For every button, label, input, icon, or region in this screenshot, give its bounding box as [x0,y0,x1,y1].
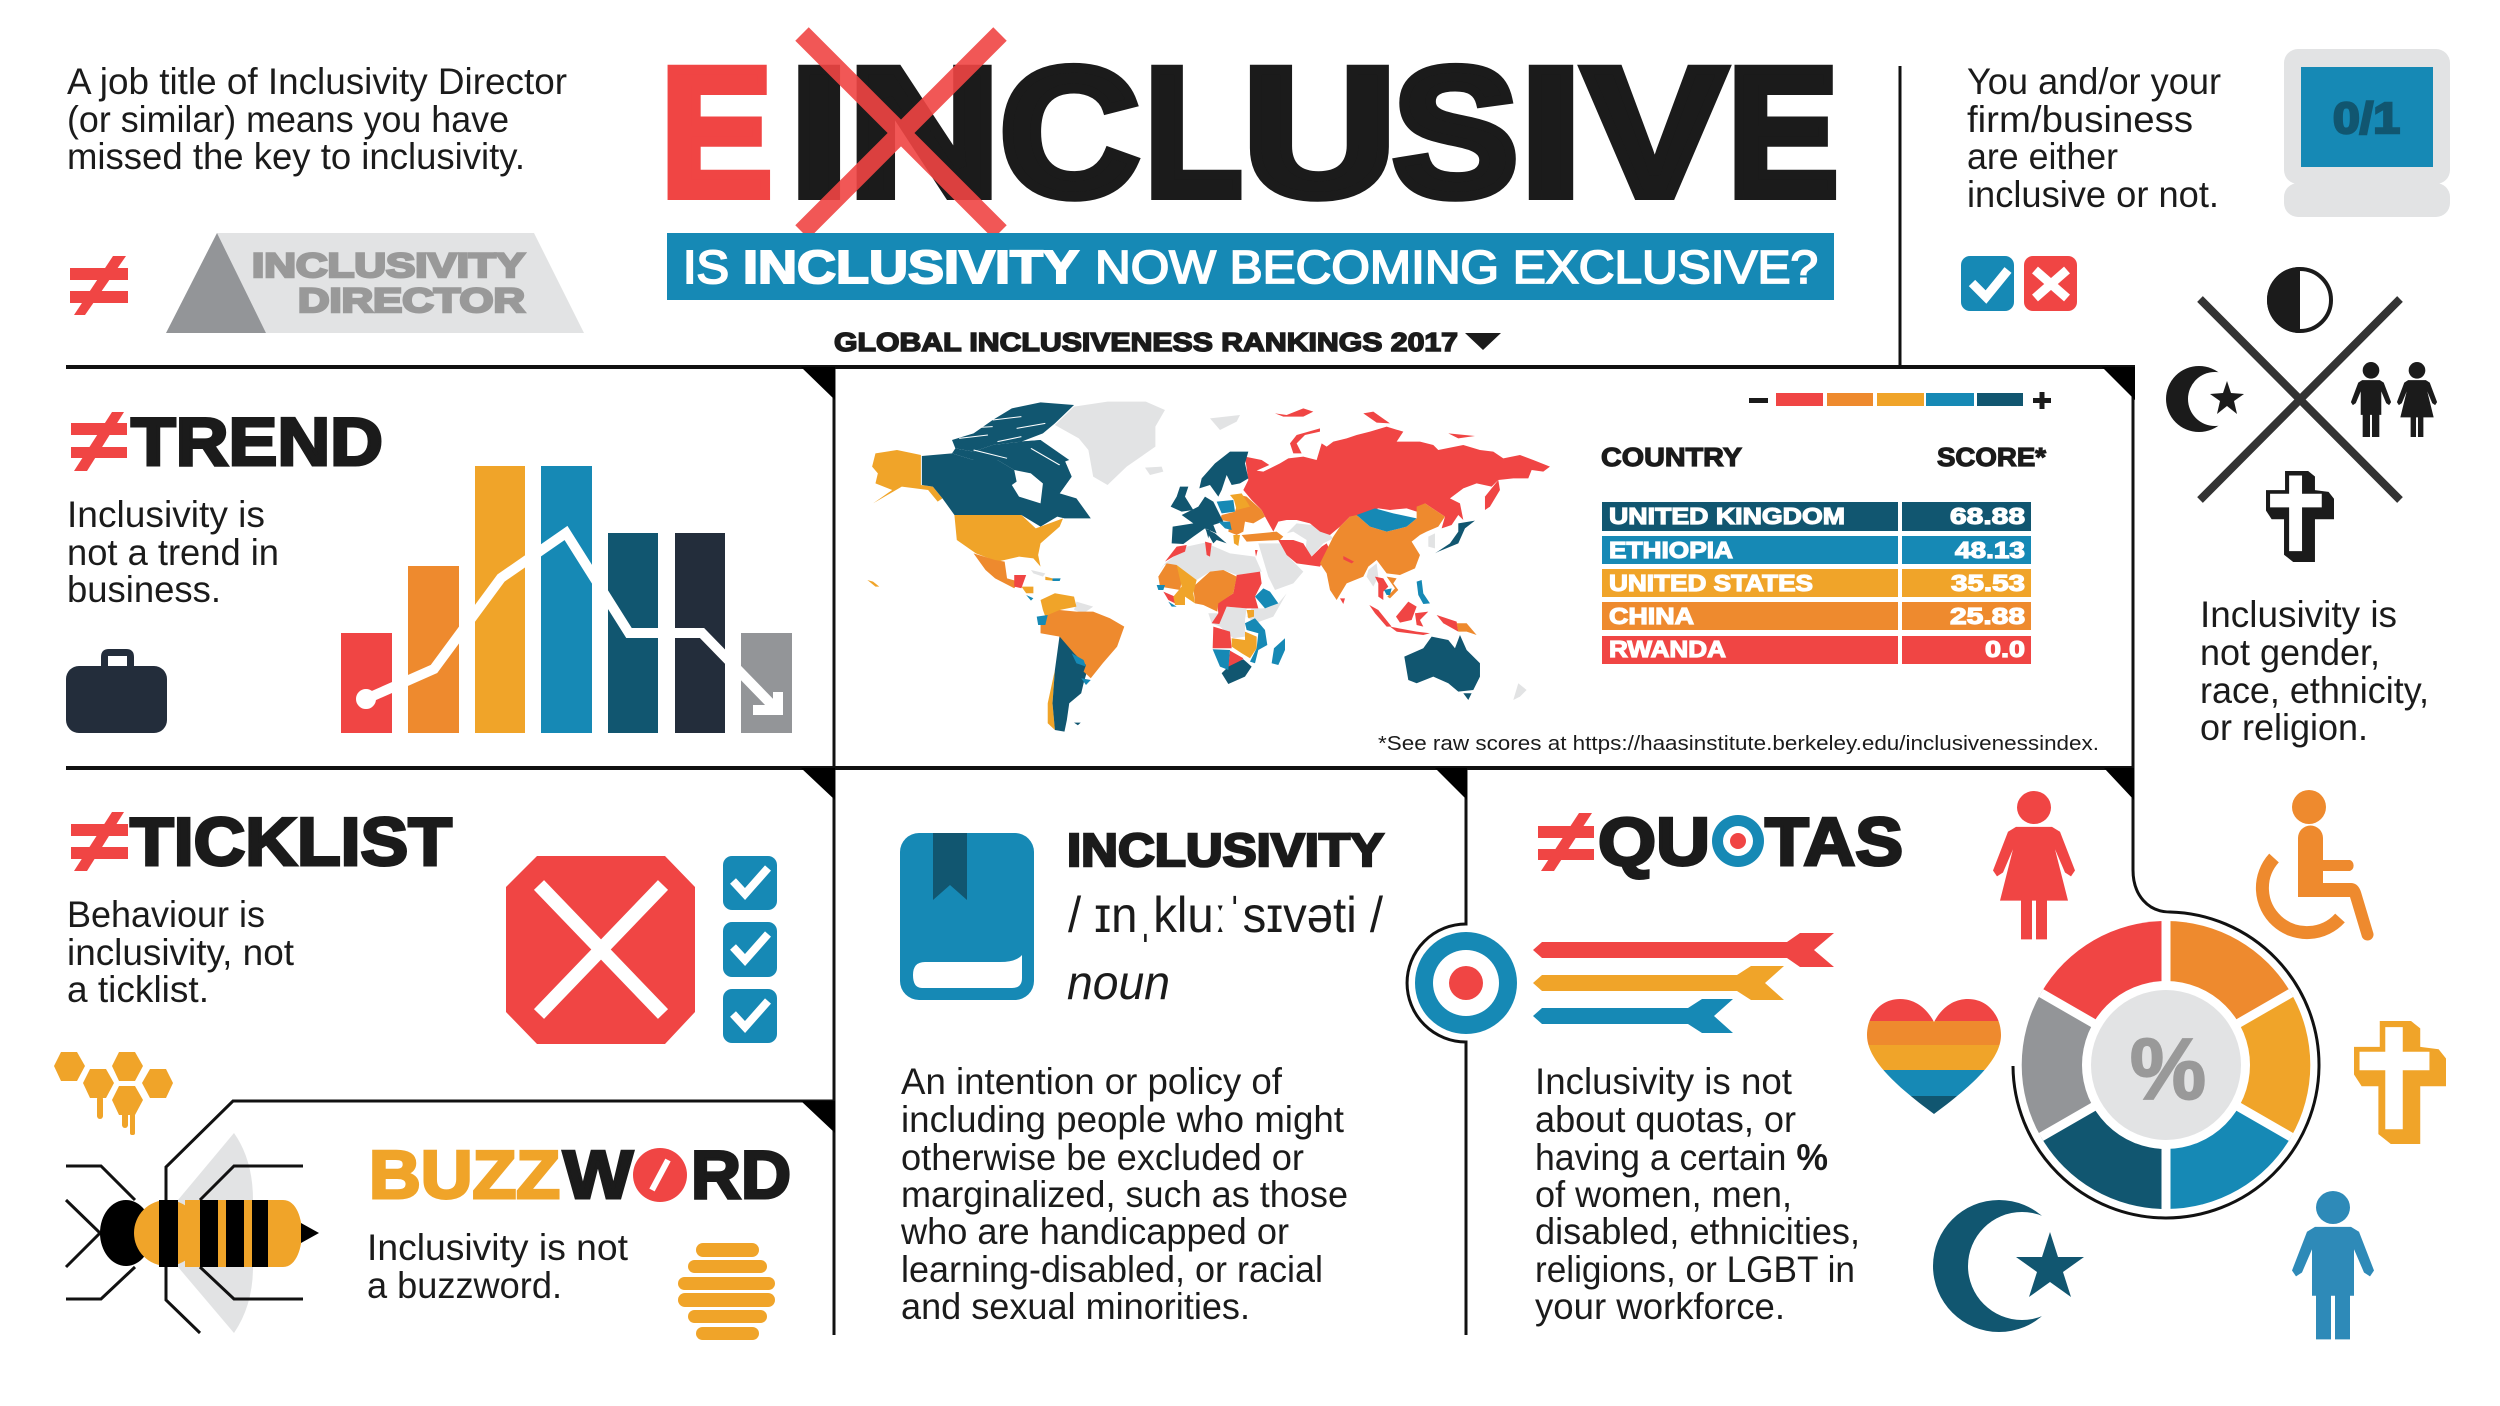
text: quotas: your workforce. [1535,1286,1785,1327]
banner: subtitle: INCLUSIVITY [743,241,1079,293]
icon: book [900,833,1034,1000]
text: buzzword: a buzzword. [367,1265,562,1306]
text: ticklist: Behaviour is [67,894,265,935]
row: rwanda [1602,636,2031,664]
text: quotas: disabled, ethnicities, [1535,1211,1860,1252]
icon: tick and cross boxes [1961,256,2077,311]
icon: target between panels [1415,932,1517,1034]
heading: buzzword: RD [691,1137,791,1213]
icon: half circle [2267,267,2331,333]
banner: subtitle: IS [683,241,729,293]
text: definition: and sexual minorities. [901,1286,1250,1327]
icon: computer showing 0/1 [2284,49,2450,217]
word class: noun [1067,957,1170,1010]
icon: not equal sign [70,256,128,315]
row: united kingdom: UNITED KINGDOM [1609,503,1845,529]
panel: quotas [1533,790,2446,1339]
heading: ticklist: TICKLIST [130,804,452,880]
banner: subtitle: NOW BECOMING EXCLUSIVE? [1095,241,1818,293]
intro text: job title: A job title of Inclusivity Director [67,61,567,102]
text: quotas [1535,1061,1860,1327]
text: either inclusive or not: inclusive or not. [1967,174,2219,215]
title: EINCLUSIVE with crossed-out IN: E [661,30,772,234]
icon: computer showing 0/1: 0/1 [2333,94,2400,143]
icon: inclusivity director desk sign: INCLUSIVITY [252,247,525,285]
heading: buzzword [369,1137,791,1213]
panel: buzzword [66,1133,791,1340]
chart: percentage donut: % [2130,1022,2206,1118]
intro text: job title: missed the key to inclusivity. [67,136,525,177]
panel: world map [867,392,2099,755]
table: country scores: COUNTRY [1601,442,1742,472]
row: united kingdom: 68.88 [1950,503,2025,529]
text: either inclusive or not: You and/or your [1967,61,2221,102]
text: either inclusive or not [1967,61,2221,215]
text: either inclusive or not: are either [1967,136,2118,177]
row: united states: UNITED STATES [1609,570,1813,596]
text: quotas: about quotas, or [1535,1099,1796,1140]
row: ethiopia: ETHIOPIA [1609,537,1733,563]
title: EINCLUSIVE with crossed-out IN: IN [790,30,1000,234]
banner: subtitle [667,233,1834,300]
icon: religious cross [2354,1021,2446,1144]
icon: woman [1993,791,2075,939]
icon: arrows [1533,933,1834,1033]
heading: quotas: TAS [1765,804,1903,880]
panel: gender race ethnicity religion [2166,267,2437,748]
icon: crescent and star [2166,366,2244,432]
icon: inclusivity director desk sign [166,233,584,333]
world map [867,402,1550,732]
text: not gender race: Inclusivity is [2200,594,2397,635]
icon: not equal [1538,813,1594,871]
icon: crossing lines [2200,299,2400,500]
title: EINCLUSIVE with crossed-out IN: I [1520,30,1582,234]
text: quotas: of women, men, [1535,1174,1792,1215]
heading: quotas: QU [1598,804,1710,880]
panel: definition [900,824,1384,1327]
table: country scores: SCORE* [1937,442,2047,472]
intro text: job title: (or similar) means you have [67,99,509,140]
text: definition: otherwise be excluded or [901,1137,1304,1178]
text: either inclusive or not: firm/business [1967,99,2193,140]
icon: honeycomb [54,1052,173,1135]
row: united states [1602,569,2031,597]
pronunciation: / ɪnˌkluːˈsɪvəti / [1068,887,1383,943]
chart: percentage donut [2022,921,2310,1209]
panel: trend [66,404,792,733]
text: definition: marginalized, such as those [901,1174,1348,1215]
text: not gender race: or religion. [2200,707,2368,748]
legend: colour scale [1749,392,2051,409]
table: country scores [1601,442,2047,664]
row: ethiopia [1602,536,2031,564]
map: eurasia africa oceania [1145,408,1550,700]
text: not gender race [2200,594,2429,748]
title: EINCLUSIVE with crossed-out IN: U [1243,30,1396,234]
icon: three ticks [723,856,777,1043]
row: rwanda: RWANDA [1609,636,1726,662]
title: EINCLUSIVE with crossed-out IN: C [1000,30,1139,234]
icon: inclusivity director desk sign: DIRECTOR [298,282,525,320]
icon: wheelchair [2262,790,2374,941]
heading: global rankings: GLOBAL INCLUSIVENESS RANKINGS 2017 [834,327,1458,357]
row: rwanda: 0.0 [1985,636,2025,662]
icon: bee [66,1133,319,1333]
bar chart [341,466,792,733]
heading: inclusivity: INCLUSIVITY [1067,824,1384,876]
title: EINCLUSIVE with crossed-out IN: L [1145,30,1242,234]
text: trend: Inclusivity is [67,494,265,535]
row: china: CHINA [1609,603,1694,629]
icon: red cross over IN [802,34,1000,232]
arrow: trend line [361,533,778,710]
icon: crescent and star [1933,1200,2084,1332]
icon: man [2292,1191,2374,1339]
text: definition: An intention or policy of [901,1061,1283,1102]
title: EINCLUSIVE with crossed-out IN: V [1584,30,1725,234]
icon: man and woman [2351,362,2437,437]
icon: red octagon cross [506,856,695,1044]
row: china [1602,602,2031,630]
text: ticklist: inclusivity, not [67,932,295,973]
intro text: job title [67,61,567,177]
icon: beehive [678,1243,775,1340]
text: buzzword: Inclusivity is not [367,1227,629,1268]
text: quotas: religions, or LGBT in [1535,1249,1855,1290]
row: united states: 35.53 [1951,570,2025,596]
heading: quotas [1598,804,1903,880]
text: not gender race: race, ethnicity, [2200,670,2429,711]
text: ticklist [67,894,295,1010]
text: quotas: having a certain % [1535,1137,1828,1178]
text: definition: learning-disabled, or racial [901,1249,1323,1290]
title: EINCLUSIVE with crossed-out IN [661,30,1838,234]
text: definition: who are handicapped or [900,1211,1289,1252]
heading: buzzword: W [563,1137,634,1213]
text: not gender race: not gender, [2200,632,2380,673]
footnote: *See raw scores at https://haasinstitute.berkeley.edu/inclusivenessindex. [1378,733,2099,755]
heading: buzzword: BUZZ [369,1137,560,1213]
icon: cross [2266,471,2334,562]
text: trend [67,494,279,610]
title: EINCLUSIVE with crossed-out IN: E [1728,30,1838,234]
text: trend: not a trend in [67,532,279,573]
map: americas and greenland [867,402,1165,732]
heading: trend: TREND [131,404,383,480]
text: ticklist: a ticklist. [67,969,209,1010]
text: quotas: Inclusivity is not [1535,1061,1793,1102]
icon: briefcase [66,649,167,733]
text: buzzword [367,1227,629,1306]
row: china: 25.88 [1950,603,2025,629]
text: definition: including people who might [901,1099,1345,1140]
panel: ticklist [67,804,777,1044]
text: definition [900,1061,1348,1327]
icon: not equal [71,812,128,871]
icon: heart with stripes [1867,999,2001,1114]
icon: not equal [71,412,127,471]
row: ethiopia: 48.13 [1955,537,2025,563]
title: EINCLUSIVE with crossed-out IN: S [1393,30,1518,234]
text: trend: business. [67,569,221,610]
row: united kingdom [1602,502,2031,531]
